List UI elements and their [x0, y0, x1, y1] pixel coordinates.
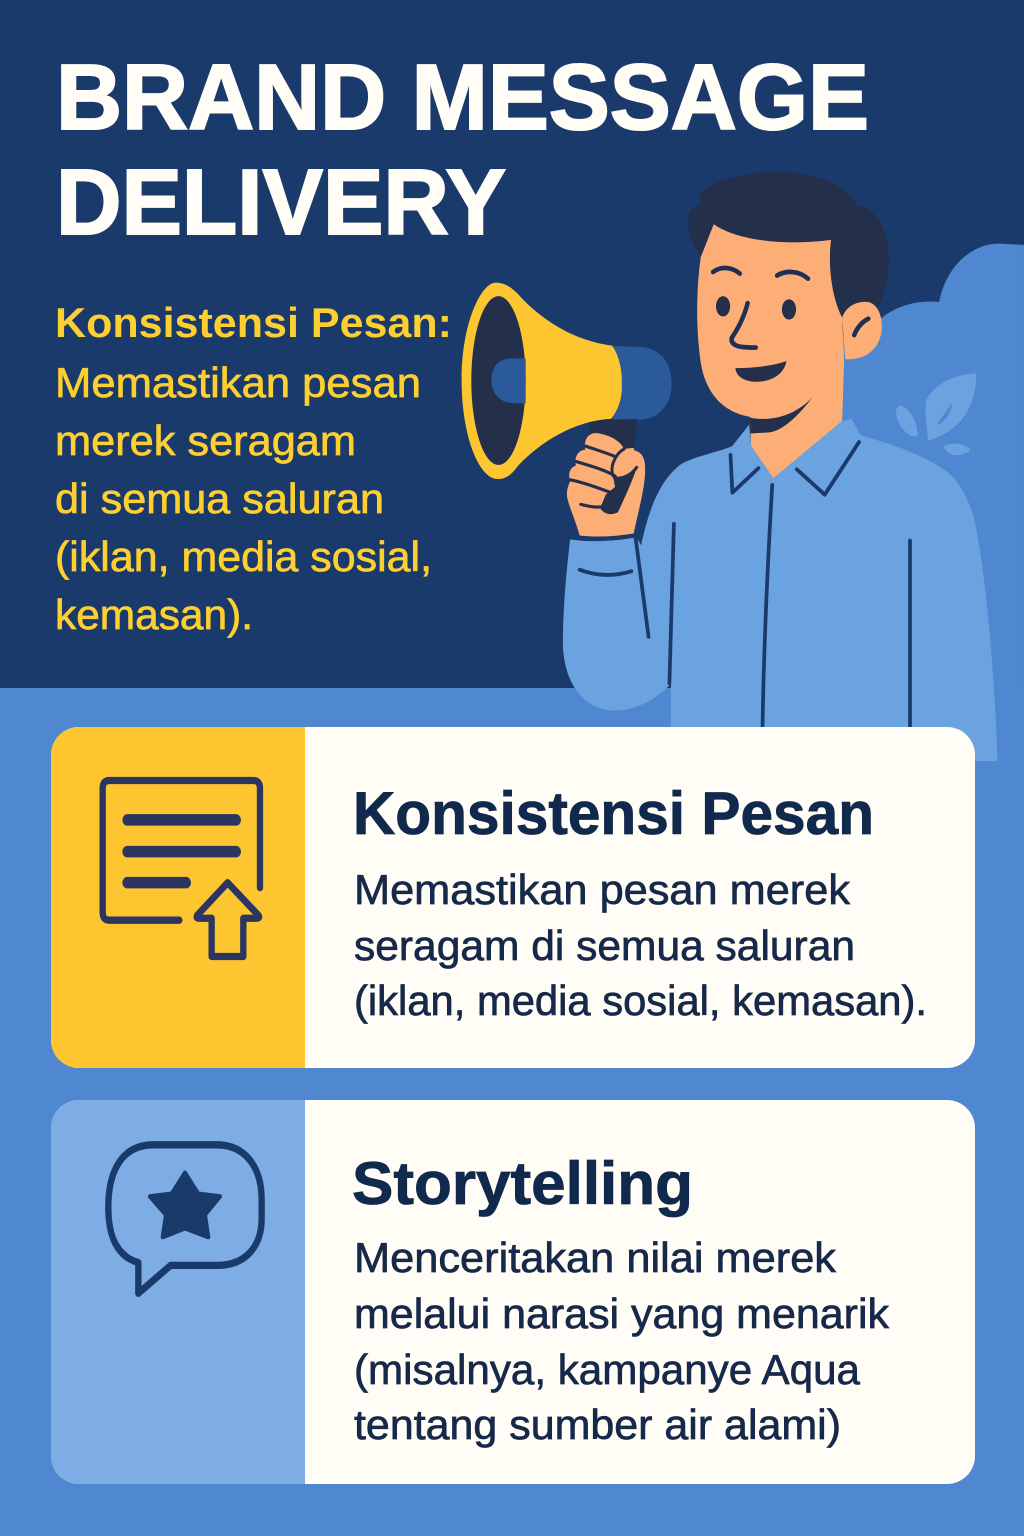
hand	[567, 433, 645, 537]
heading: Storytelling	[352, 1150, 693, 1217]
icon panel: yellow	[51, 727, 305, 1068]
body text: Menceritakan nilai merek	[354, 1234, 837, 1281]
title: DELIVERY	[56, 150, 506, 254]
intro text: di semua saluran	[55, 475, 384, 522]
intro text: Konsistensi Pesan:	[55, 299, 452, 346]
body text: Memastikan pesan merek	[354, 866, 851, 913]
panel: storytelling	[51, 1100, 975, 1484]
panel: konsistensi pesan	[51, 727, 975, 1068]
title	[56, 45, 869, 254]
shirt	[563, 419, 998, 761]
title: BRAND MESSAGE	[56, 45, 869, 149]
intro text: merek seragam	[55, 417, 356, 464]
megaphone	[462, 283, 672, 479]
body text	[354, 866, 927, 1024]
header panel	[0, 0, 1024, 688]
body text: (iklan, media sosial, kemasan).	[354, 977, 927, 1024]
heading: Konsistensi Pesan	[353, 780, 874, 847]
intro text: (iklan, media sosial,	[55, 533, 432, 580]
shirt lines	[570, 442, 910, 728]
icon: speech bubble with star	[108, 1145, 262, 1293]
body text: melalui narasi yang menarik	[354, 1290, 890, 1337]
head	[688, 172, 889, 478]
illustration: man with megaphone	[462, 172, 1024, 767]
body text	[354, 1234, 890, 1448]
intro text: kemasan).	[55, 591, 253, 638]
background cloud	[842, 244, 1024, 767]
background leaves	[896, 373, 976, 455]
icon panel: light blue	[51, 1100, 305, 1484]
body text: (misalnya, kampanye Aqua	[354, 1346, 861, 1393]
icon: document with up arrow	[103, 780, 260, 957]
intro text	[55, 299, 452, 638]
body text: tentang sumber air alami)	[354, 1401, 841, 1448]
body text: seragam di semua saluran	[354, 922, 855, 969]
intro text: Memastikan pesan	[55, 359, 421, 406]
